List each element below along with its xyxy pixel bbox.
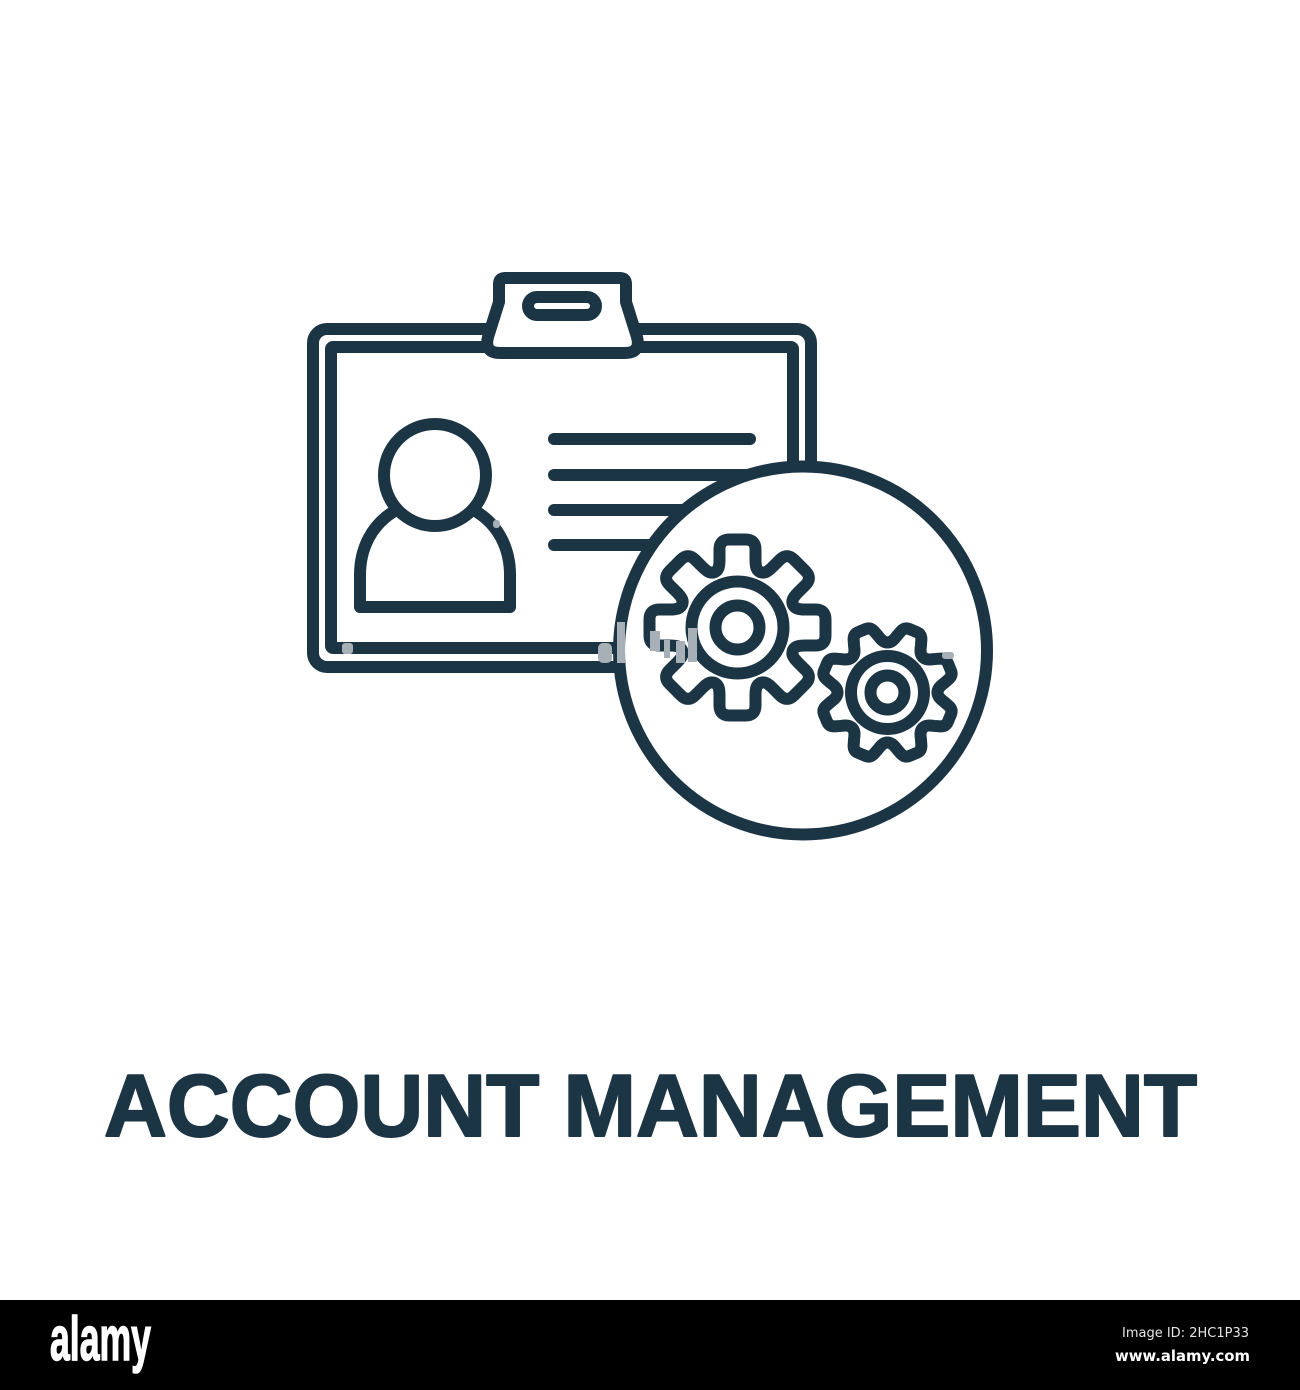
icon: badge clip <box>487 278 638 353</box>
icon: card text lines <box>554 439 750 545</box>
image id: Image ID: 2HC1P33 <box>1122 1326 1249 1341</box>
icon: circle badge <box>619 466 987 834</box>
icon: ID card frame <box>313 329 811 667</box>
website address: www.alamy.com <box>1115 1347 1250 1365</box>
icon: person portrait <box>360 424 510 607</box>
title: ACCOUNT MANAGEMENT <box>104 1056 1197 1155</box>
watermark fragments <box>342 520 954 663</box>
icon: account management badge with gears <box>313 278 987 834</box>
footer bar <box>0 1300 1300 1390</box>
icon: large gear <box>650 540 826 716</box>
footer logo: alamy <box>50 1305 151 1374</box>
icon: small gear <box>800 605 975 780</box>
